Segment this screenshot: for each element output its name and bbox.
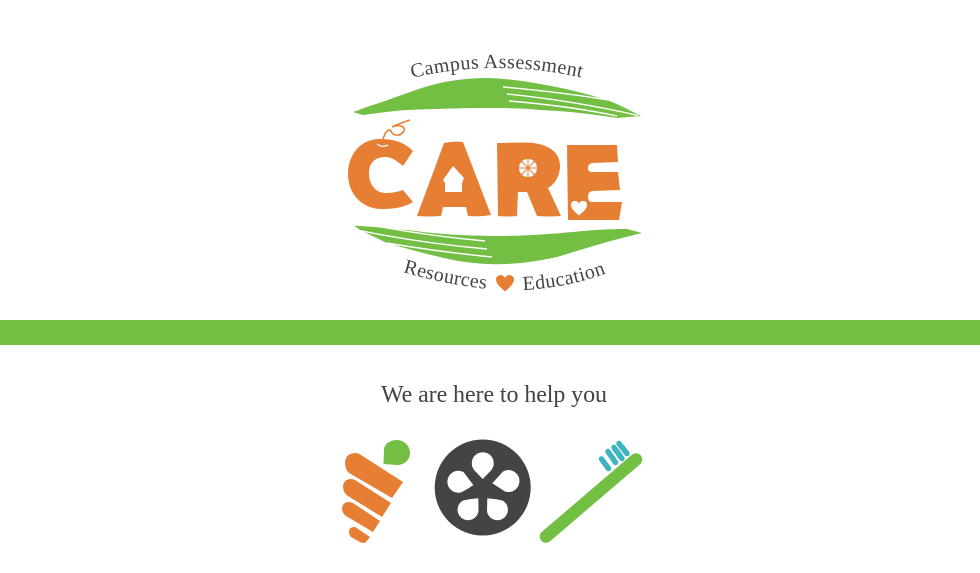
top green brush stroke [353, 78, 641, 118]
logo [348, 54, 642, 292]
icon: dark circle with petals [435, 440, 531, 536]
green divider band [0, 320, 980, 345]
icon: carrot [342, 440, 410, 543]
bottom green brush stroke [354, 226, 642, 264]
CARE lettering [348, 120, 622, 220]
logo tagline: Education: Education [522, 266, 606, 290]
letter C with apple stem [348, 120, 413, 209]
heading: We are here to help you [381, 382, 607, 408]
logo tagline: Resources: Resources [404, 260, 486, 288]
logo tagline: Campus Assessment: Campus Assessment [411, 54, 583, 78]
letter A with house cutout [417, 142, 491, 216]
carrot leaf [384, 440, 410, 465]
icon: orange heart [496, 275, 514, 292]
letter R with orange slice [497, 143, 561, 216]
icon: toothbrush [546, 444, 636, 536]
letter E with heart [567, 145, 622, 220]
